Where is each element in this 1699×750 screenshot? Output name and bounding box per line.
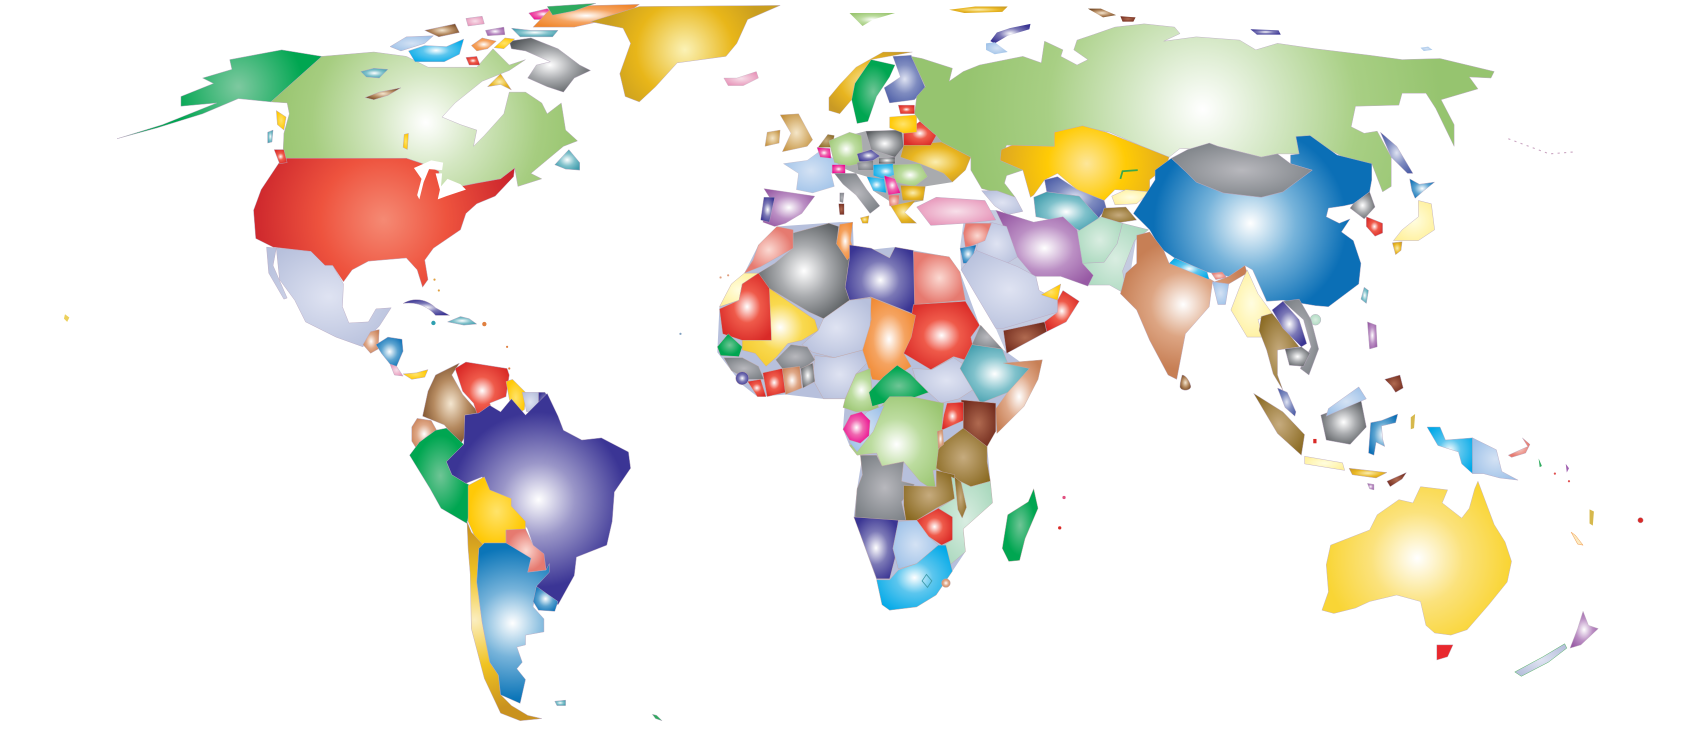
country: south korea xyxy=(1366,217,1383,236)
country: iraq xyxy=(976,222,1017,266)
region: oceania xyxy=(1322,481,1643,676)
aleutian and kuril islets xyxy=(1508,139,1577,154)
country: malawi xyxy=(955,477,967,518)
region: europe xyxy=(724,52,971,227)
hawaii xyxy=(64,314,69,322)
country: banks island xyxy=(390,36,433,51)
country: senegal xyxy=(717,334,742,357)
country: serbia xyxy=(884,176,900,195)
severnaya zemlya xyxy=(1088,9,1116,17)
country: rwanda and burundi xyxy=(937,429,944,449)
country: belgium xyxy=(817,147,831,158)
country: hungary xyxy=(873,164,898,179)
country: uganda xyxy=(942,402,963,430)
country: slovakia xyxy=(879,157,895,164)
country: french guiana xyxy=(539,392,553,415)
novaya zemlya south xyxy=(986,42,1008,54)
region: north america xyxy=(117,3,780,379)
novaya zemlya north xyxy=(990,24,1030,43)
new siberian islands xyxy=(1250,29,1281,35)
country: guinea xyxy=(724,358,764,379)
caribbean islets xyxy=(431,279,510,370)
country: greenland xyxy=(591,5,780,102)
country: ukraine xyxy=(900,142,971,182)
country: switzerland xyxy=(832,165,845,173)
country: mexico xyxy=(267,247,391,347)
country: republic of congo xyxy=(850,405,884,452)
country: uae xyxy=(1041,284,1061,300)
country: bhutan xyxy=(1211,272,1227,280)
country: baffin island xyxy=(509,38,591,92)
svalbard xyxy=(850,13,895,26)
new zealand north island xyxy=(1570,611,1598,648)
country: india xyxy=(1120,232,1247,379)
country: germany xyxy=(829,132,864,166)
country: brazil xyxy=(446,393,631,605)
country: russia xyxy=(911,24,1494,197)
country: ireland xyxy=(765,130,780,146)
country: jordan and israel xyxy=(960,245,976,263)
country: austria xyxy=(857,160,873,170)
country: madagascar xyxy=(1002,489,1038,561)
country: sumatra xyxy=(1254,393,1305,455)
franz josef land xyxy=(949,7,1008,13)
country: mali xyxy=(742,288,818,366)
country: eritrea xyxy=(972,325,1002,349)
country: ethiopia xyxy=(960,345,1029,403)
country: ecuador xyxy=(412,418,437,450)
country: botswana xyxy=(893,520,938,569)
country: sudan xyxy=(904,301,980,370)
falkland and south georgia islands xyxy=(555,700,662,721)
country: turkmenistan xyxy=(1034,192,1099,232)
country: zambia xyxy=(904,470,955,520)
central europe backing xyxy=(829,131,971,206)
country: panama xyxy=(403,370,428,379)
country: paraguay xyxy=(506,529,546,572)
country: cuba xyxy=(403,300,450,315)
country: kyushu xyxy=(1392,242,1402,255)
country: iran xyxy=(996,210,1093,286)
country: norway xyxy=(829,52,912,114)
country: bulgaria xyxy=(900,185,925,201)
country: cameroon xyxy=(843,368,880,412)
country: spain xyxy=(763,189,815,227)
country: portugal xyxy=(761,197,775,222)
country: tajikistan xyxy=(1101,207,1137,223)
country: costa rica xyxy=(390,364,403,376)
country: uzbekistan xyxy=(1045,177,1106,218)
country: latvia and lithuania xyxy=(890,115,917,133)
country: united states xyxy=(254,158,515,287)
caucasus xyxy=(982,191,1023,215)
country: united kingdom xyxy=(780,114,813,152)
arctic islands xyxy=(425,3,639,90)
country: suriname xyxy=(522,392,539,412)
country: libya xyxy=(845,245,916,315)
africa backing xyxy=(717,222,1042,610)
country: sweden xyxy=(852,60,895,124)
country: borneo xyxy=(1321,400,1366,444)
country: netherlands xyxy=(818,134,834,147)
country: western sahara xyxy=(719,273,758,307)
country: lesotho xyxy=(922,574,932,587)
great lakes xyxy=(414,160,466,199)
country: south africa xyxy=(877,545,952,610)
country: sicily xyxy=(860,216,869,223)
country: ivory coast xyxy=(763,368,786,397)
country: oman xyxy=(1045,290,1079,332)
country: bolivia xyxy=(468,477,526,546)
country: honduras and nicaragua xyxy=(376,337,403,366)
arctic russian islands xyxy=(64,7,1577,322)
aral sea xyxy=(1120,170,1138,179)
country: papua new guinea xyxy=(1473,438,1518,480)
country: gabon xyxy=(843,412,870,443)
country: thailand xyxy=(1259,313,1299,390)
new zealand south island xyxy=(1515,644,1567,676)
country: ghana xyxy=(782,366,802,395)
atlantic islets xyxy=(679,274,1066,529)
small arctic island xyxy=(1120,16,1136,22)
country: afghanistan xyxy=(1077,217,1123,263)
country: sulawesi xyxy=(1369,414,1398,455)
country: tunisia xyxy=(836,222,854,260)
country: romania xyxy=(893,164,928,186)
country: china xyxy=(1133,135,1372,307)
country: java xyxy=(1305,456,1345,470)
country: malaysia xyxy=(1278,388,1296,416)
new caledonia xyxy=(1571,532,1583,545)
country: czech republic xyxy=(857,150,880,161)
country: mongolia xyxy=(1171,143,1312,197)
country: burkina faso xyxy=(776,345,815,368)
country: poland xyxy=(866,130,904,157)
country: mauritania xyxy=(719,273,775,340)
country: belarus xyxy=(904,121,936,145)
country: bosnia and croatia xyxy=(867,177,886,193)
country: yemen xyxy=(1003,322,1047,353)
fiji xyxy=(1638,518,1643,523)
region: asia xyxy=(911,24,1594,526)
country: niger xyxy=(802,298,871,358)
country: greece xyxy=(891,201,917,223)
country: syria xyxy=(963,223,991,248)
country: liberia xyxy=(748,379,766,397)
country: nigeria xyxy=(813,350,867,399)
country: peru xyxy=(410,428,471,523)
country: philippines north xyxy=(1367,322,1377,349)
country: argentina xyxy=(477,543,549,703)
country: colombia xyxy=(423,363,479,444)
country: algeria xyxy=(758,223,850,319)
country: dr congo xyxy=(850,397,944,492)
country: canada xyxy=(271,49,578,195)
country: hokkaido xyxy=(1410,179,1435,198)
country: angola xyxy=(855,455,915,520)
country: mozambique xyxy=(938,477,993,565)
country: togo and benin xyxy=(801,363,815,388)
country: chad xyxy=(863,297,916,382)
country: morocco xyxy=(744,227,793,273)
country: guatemala xyxy=(363,329,379,353)
moluccas and pacific islets xyxy=(1313,414,1594,526)
country: nepal xyxy=(1169,258,1209,280)
country: uruguay xyxy=(533,586,558,611)
country: newfoundland xyxy=(555,150,580,170)
lesser sunda islands xyxy=(1349,468,1406,490)
country: west papua xyxy=(1427,427,1473,474)
great bear lake xyxy=(361,68,388,78)
country: australia xyxy=(1322,481,1512,635)
country: kazakhstan xyxy=(1000,126,1169,201)
country: south sudan xyxy=(912,358,981,403)
country: hainan xyxy=(1310,314,1321,325)
new britain xyxy=(1508,438,1530,457)
country: kenya xyxy=(961,400,996,447)
country: kyrgyzstan xyxy=(1112,190,1150,205)
country: sakhalin xyxy=(1380,132,1413,173)
country: sri lanka xyxy=(1180,375,1191,390)
country: vietnam xyxy=(1283,299,1319,375)
country: central african republic xyxy=(869,365,929,406)
country: taiwan xyxy=(1361,287,1369,303)
country: tanzania xyxy=(936,428,990,487)
country: somalia xyxy=(996,360,1042,434)
country: guyana xyxy=(506,379,526,416)
country: myanmar xyxy=(1231,270,1272,337)
country: france xyxy=(783,148,839,193)
british columbia coastal islands xyxy=(268,111,287,164)
country: venezuela xyxy=(455,362,509,419)
country: japan xyxy=(1393,201,1435,241)
country: saudi arabia xyxy=(961,250,1058,328)
lake winnipeg xyxy=(403,133,408,150)
wrangel island xyxy=(1421,47,1432,51)
country: cambodia xyxy=(1285,347,1310,366)
country: chile xyxy=(467,521,542,721)
great slave lake xyxy=(365,88,401,100)
country: bangladesh xyxy=(1212,282,1229,305)
tasmania xyxy=(1437,645,1453,660)
country: italy xyxy=(834,173,880,214)
middle east backing xyxy=(917,207,1137,353)
country: finland xyxy=(884,55,925,103)
country: alaska xyxy=(117,50,322,139)
country: turkey xyxy=(917,197,996,225)
region: south america xyxy=(410,362,662,721)
country: zimbabwe xyxy=(917,508,952,545)
region: africa xyxy=(679,222,1066,610)
country: sierra leone xyxy=(736,372,749,385)
country: egypt xyxy=(913,251,965,305)
country: estonia xyxy=(898,105,915,114)
country: philippines south xyxy=(1385,375,1403,392)
country: corsica xyxy=(840,193,844,203)
country: iceland xyxy=(724,72,758,86)
country: hispaniola xyxy=(448,316,477,325)
country: victoria island xyxy=(408,39,464,62)
country: north korea xyxy=(1350,192,1375,219)
country: laos xyxy=(1272,301,1307,347)
country: albania xyxy=(889,195,899,207)
country: sabah and sarawak xyxy=(1326,387,1366,416)
country: swaziland xyxy=(942,579,950,587)
country: pakistan xyxy=(1082,223,1149,295)
country: namibia xyxy=(854,517,898,579)
country: sardinia xyxy=(839,204,844,215)
